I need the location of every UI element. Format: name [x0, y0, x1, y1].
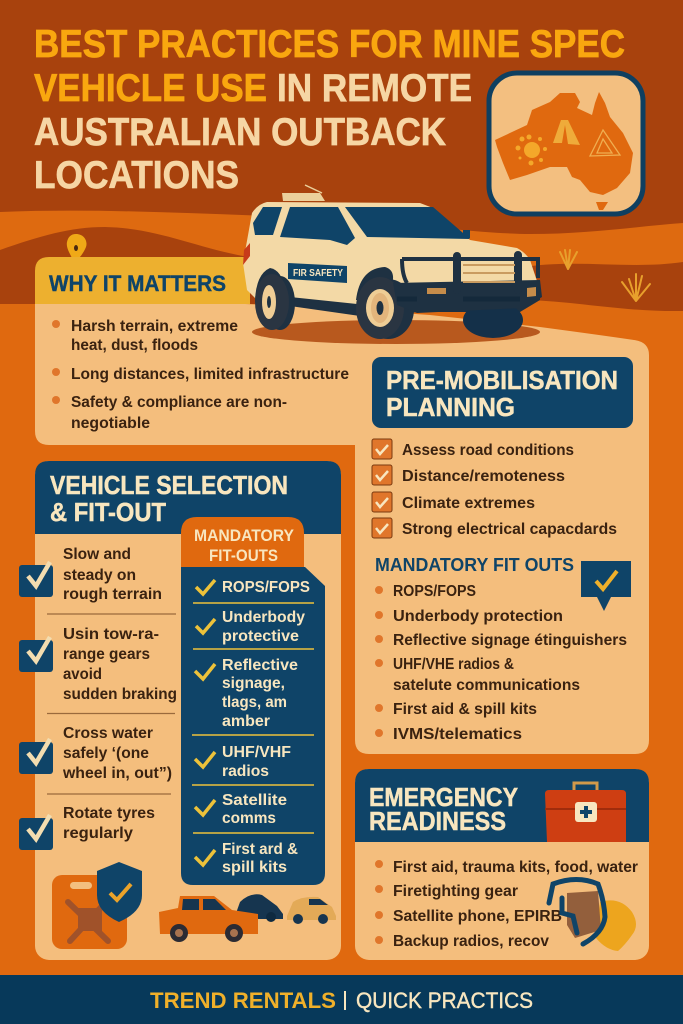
list: emergency bullets: First aid, trauma kits, food, water: [393, 859, 638, 876]
list: driving practices: Usin tow-ra-: [63, 626, 159, 643]
list: why it matters bullets: Harsh terrain, extreme: [71, 318, 238, 335]
list: fit-out items: ROPS/FOPS: [222, 579, 310, 596]
icon: convoy of vehicles: [159, 894, 336, 942]
list: why it matters bullets: [52, 318, 349, 432]
title: IN REMOTE: [277, 67, 472, 110]
list: fit-out items: [222, 579, 310, 876]
list: emergency bullets: Satellite phone, EPIRB: [393, 908, 562, 925]
list: planning checks: Climate extremes: [402, 495, 535, 512]
list: driving practices: regularly: [63, 825, 133, 842]
list: driving practices: Slow and: [63, 546, 131, 563]
footer: [0, 975, 683, 1024]
heading: mandatory fit-outs tab: MANDATORY: [194, 526, 295, 545]
list: fit-out items: tlags, am: [222, 694, 287, 711]
list: mandatory fit outs: ROPS/FOPS: [393, 583, 476, 600]
title: BEST PRACTICES FOR MINE SPEC: [34, 23, 625, 66]
panel: vehicle selection and fit-out: [19, 461, 341, 960]
icon: yellow checks: [195, 580, 215, 865]
list: planning checks: Strong electrical capacdards: [402, 521, 617, 538]
title: [34, 23, 625, 197]
list: driving practices: rough terrain: [63, 586, 162, 603]
heading: vehicle selection: VEHICLE SELECTION: [50, 470, 288, 500]
list: driving practices: range gears: [63, 646, 150, 663]
heading: mandatory fit-outs tab: FIT-OUTS: [209, 546, 278, 565]
list: fit-out items: spill kits: [222, 859, 287, 876]
list: mandatory fit outs: IVMS/telematics: [393, 726, 522, 743]
list: planning checks: [402, 442, 617, 538]
list: mandatory fit outs: [375, 583, 627, 743]
icon: grass tufts: [560, 250, 650, 301]
title: AUSTRALIAN OUTBACK: [34, 111, 446, 154]
list: driving practices: avoid: [63, 666, 102, 683]
list: fit-out items: UHF/VHF: [222, 744, 291, 761]
title: VEHICLE USE: [34, 67, 267, 110]
list: why it matters bullets: negotiable: [71, 415, 150, 432]
list: fit-out items: protective: [222, 628, 299, 645]
illustration: mine spec vehicle: FIR SAFETY: [293, 268, 343, 279]
heading: mandatory fit outs: MANDATORY FIT OUTS: [375, 555, 574, 575]
panel: why it matters: [35, 257, 349, 432]
list: fit-out items: Reflective: [222, 657, 298, 674]
title: LOCATIONS: [34, 154, 239, 197]
panel: cream body background: [35, 304, 649, 754]
list: driving practices: Cross water: [63, 725, 153, 742]
list: emergency bullets: Firetighting gear: [393, 883, 518, 900]
list: mandatory fit outs: Reflective signage étinguishers: [393, 632, 627, 649]
list: fit-out items: radios: [222, 763, 269, 780]
icon: Australia map: [489, 73, 643, 214]
list: mandatory fit outs: First aid & spill kits: [393, 701, 537, 718]
list: why it matters bullets: Long distances, limited infrastructure: [71, 366, 349, 383]
icon: jerry can: [52, 875, 127, 949]
icon: orange checkboxes: [372, 439, 392, 538]
callout: mandatory fit-outs: [181, 517, 325, 885]
heading: why it matters: WHY IT MATTERS: [49, 271, 226, 296]
list: emergency bullets: [375, 859, 638, 950]
list: mandatory fit outs: UHF/VHE radios &: [393, 656, 514, 673]
heading: pre-mobilisation planning: [372, 357, 633, 428]
list: fit-out items: Underbody: [222, 609, 305, 626]
illustration: mine spec vehicle: [243, 185, 542, 344]
background: outback sky and hills: [0, 0, 683, 330]
heading: emergency readiness: EMERGENCY: [369, 782, 518, 812]
list: mandatory fit outs: satelute communications: [393, 677, 580, 694]
heading: mandatory fit-outs tab: [181, 517, 304, 567]
icon: location pin: [67, 234, 87, 258]
list: driving practices: safely ‘(one: [63, 745, 149, 762]
list: driving practices: [47, 546, 177, 842]
list: emergency bullets: Backup radios, recov: [393, 933, 549, 950]
footer: TREND RENTALS: [150, 988, 336, 1013]
icon: first aid case: [545, 783, 626, 842]
heading: why it matters: [35, 257, 250, 304]
list: planning checks: Assess road conditions: [402, 442, 574, 459]
list: fit-out items: First ard &: [222, 841, 298, 858]
icon: headset and helmet: [549, 880, 636, 951]
heading: vehicle selection: & FIT-OUT: [50, 497, 166, 527]
panel: pre-mobilisation planning: [372, 357, 633, 743]
footer: QUICK PRACTICS: [356, 988, 533, 1013]
list: mandatory fit outs: Underbody protection: [393, 608, 563, 625]
list: fit-out items: Satellite: [222, 792, 287, 809]
icon: shield: [97, 862, 142, 922]
list: fit-out items: comms: [222, 810, 276, 827]
heading: emergency readiness: [355, 769, 649, 842]
list: why it matters bullets: heat, dust, floods: [71, 337, 198, 354]
panel: emergency readiness: [355, 769, 649, 960]
list: driving practices: Rotate tyres: [63, 805, 155, 822]
heading: vehicle selection: [35, 461, 341, 534]
list: fit-out items: amber: [222, 713, 270, 730]
list: driving practices: steady on: [63, 567, 136, 584]
list: why it matters bullets: Safety & compliance are non-: [71, 394, 287, 411]
list: driving practices: wheel in, out”): [62, 765, 172, 782]
heading: emergency readiness: READINESS: [369, 806, 506, 836]
icon: check tag: [581, 561, 631, 611]
list: fit-out items: signage,: [222, 675, 285, 692]
icon: navy checkboxes: [19, 562, 53, 850]
list: driving practices: sudden braking: [63, 686, 177, 703]
list: planning checks: Distance/remoteness: [402, 468, 565, 485]
heading: pre-mobilisation planning: PRE-MOBILISATION: [386, 365, 618, 395]
heading: pre-mobilisation planning: PLANNING: [386, 392, 515, 422]
